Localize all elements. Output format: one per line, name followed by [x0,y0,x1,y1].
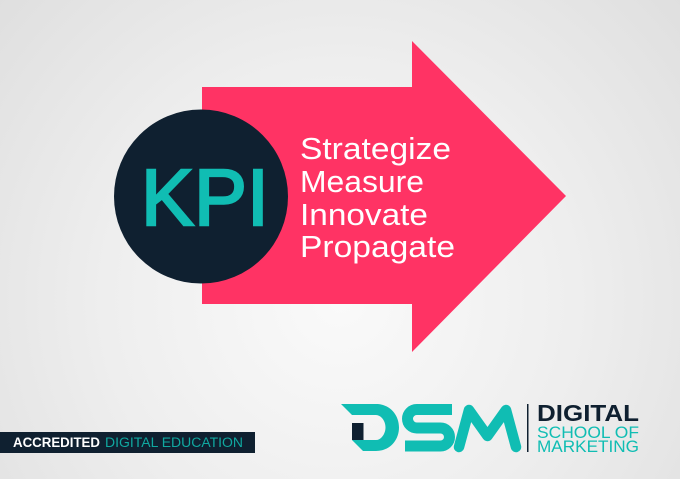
word list: Measure [300,164,424,199]
word list: Propagate [300,229,455,264]
accredited banner [0,432,255,453]
logo letter S [405,410,452,446]
KPI circle [114,110,288,284]
logo letter M [459,410,516,447]
accredited banner: DIGITAL EDUCATION [105,435,243,450]
logo letter D [341,404,399,451]
logo wordmark [537,400,639,456]
accredited banner: ACCREDITED [13,435,100,450]
DSM logo [341,400,639,456]
logo wordmark: MARKETING [537,437,639,456]
logo dark square [352,423,364,440]
pink arrow [202,41,566,352]
logo wordmark: SCHOOL OF [537,423,639,442]
word list [300,131,455,264]
KPI label: KPI [141,153,269,242]
logo divider [527,404,528,452]
word list: Innovate [300,197,428,232]
word list: Strategize [300,131,451,166]
logo wordmark: DIGITAL [537,400,639,426]
